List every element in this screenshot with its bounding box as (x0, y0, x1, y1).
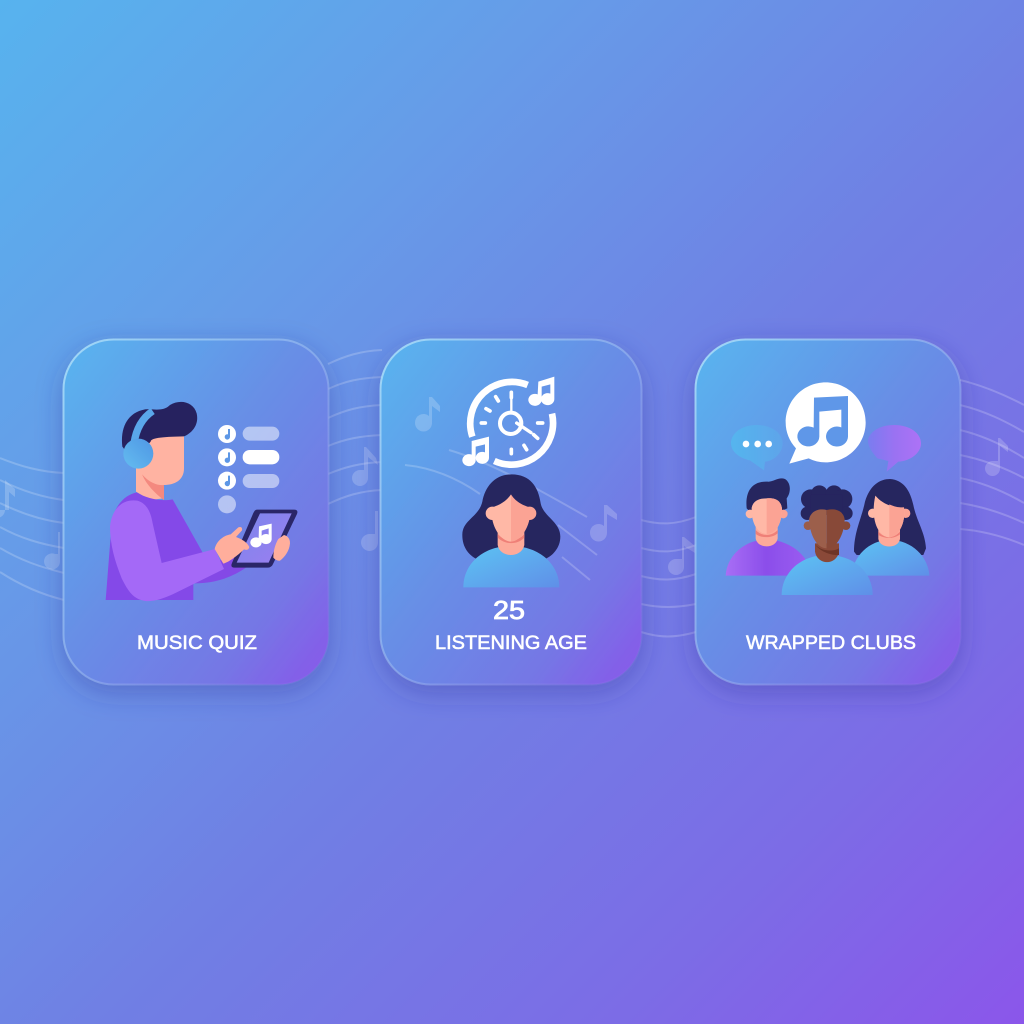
woman ears (486, 507, 499, 520)
neck (136, 462, 163, 500)
face (140, 436, 184, 485)
music note upper right (528, 377, 554, 406)
panel: listening age (380, 340, 642, 684)
tablet hands (215, 527, 249, 564)
sleeve (110, 500, 224, 601)
background music staves (0, 350, 1024, 636)
label: listening age: LISTENING AGE (435, 633, 587, 654)
woman hair (462, 474, 560, 559)
far arm (195, 555, 247, 583)
music note lower left (462, 437, 489, 466)
clock ticks and hands (481, 392, 543, 454)
left speech bubble (731, 425, 783, 470)
tablet (231, 510, 297, 568)
right speech bubble (868, 425, 921, 472)
woman face (491, 494, 511, 542)
background music notes (0, 438, 1008, 575)
number: 25: 25 (493, 595, 525, 625)
tablet music note (250, 524, 272, 547)
sweater body (106, 492, 204, 600)
man on left (726, 478, 807, 576)
headphone ear cup (123, 439, 153, 469)
man in centre (782, 485, 873, 595)
clock ring (470, 382, 553, 465)
hair (122, 402, 197, 455)
quiz checklist (218, 425, 279, 513)
panel: music quiz (64, 340, 328, 684)
woman shirt (463, 546, 559, 587)
woman neck (498, 530, 524, 555)
card decorative notes and curves (405, 397, 617, 580)
illustration: person with headphones and tablet (106, 402, 297, 601)
woman on right (851, 479, 929, 576)
card background (696, 340, 960, 684)
illustration: clock with music notes and woman (462, 377, 560, 587)
panel: wrapped clubs (696, 340, 960, 684)
card background (64, 340, 328, 684)
card background (380, 340, 642, 684)
curly hair (801, 485, 853, 520)
headphone band (134, 411, 153, 443)
main music speech bubble (786, 382, 866, 464)
label: wrapped clubs: WRAPPED CLUBS (746, 633, 916, 654)
illustration: group chat about music (726, 382, 929, 595)
label: music quiz: MUSIC QUIZ (137, 633, 257, 654)
